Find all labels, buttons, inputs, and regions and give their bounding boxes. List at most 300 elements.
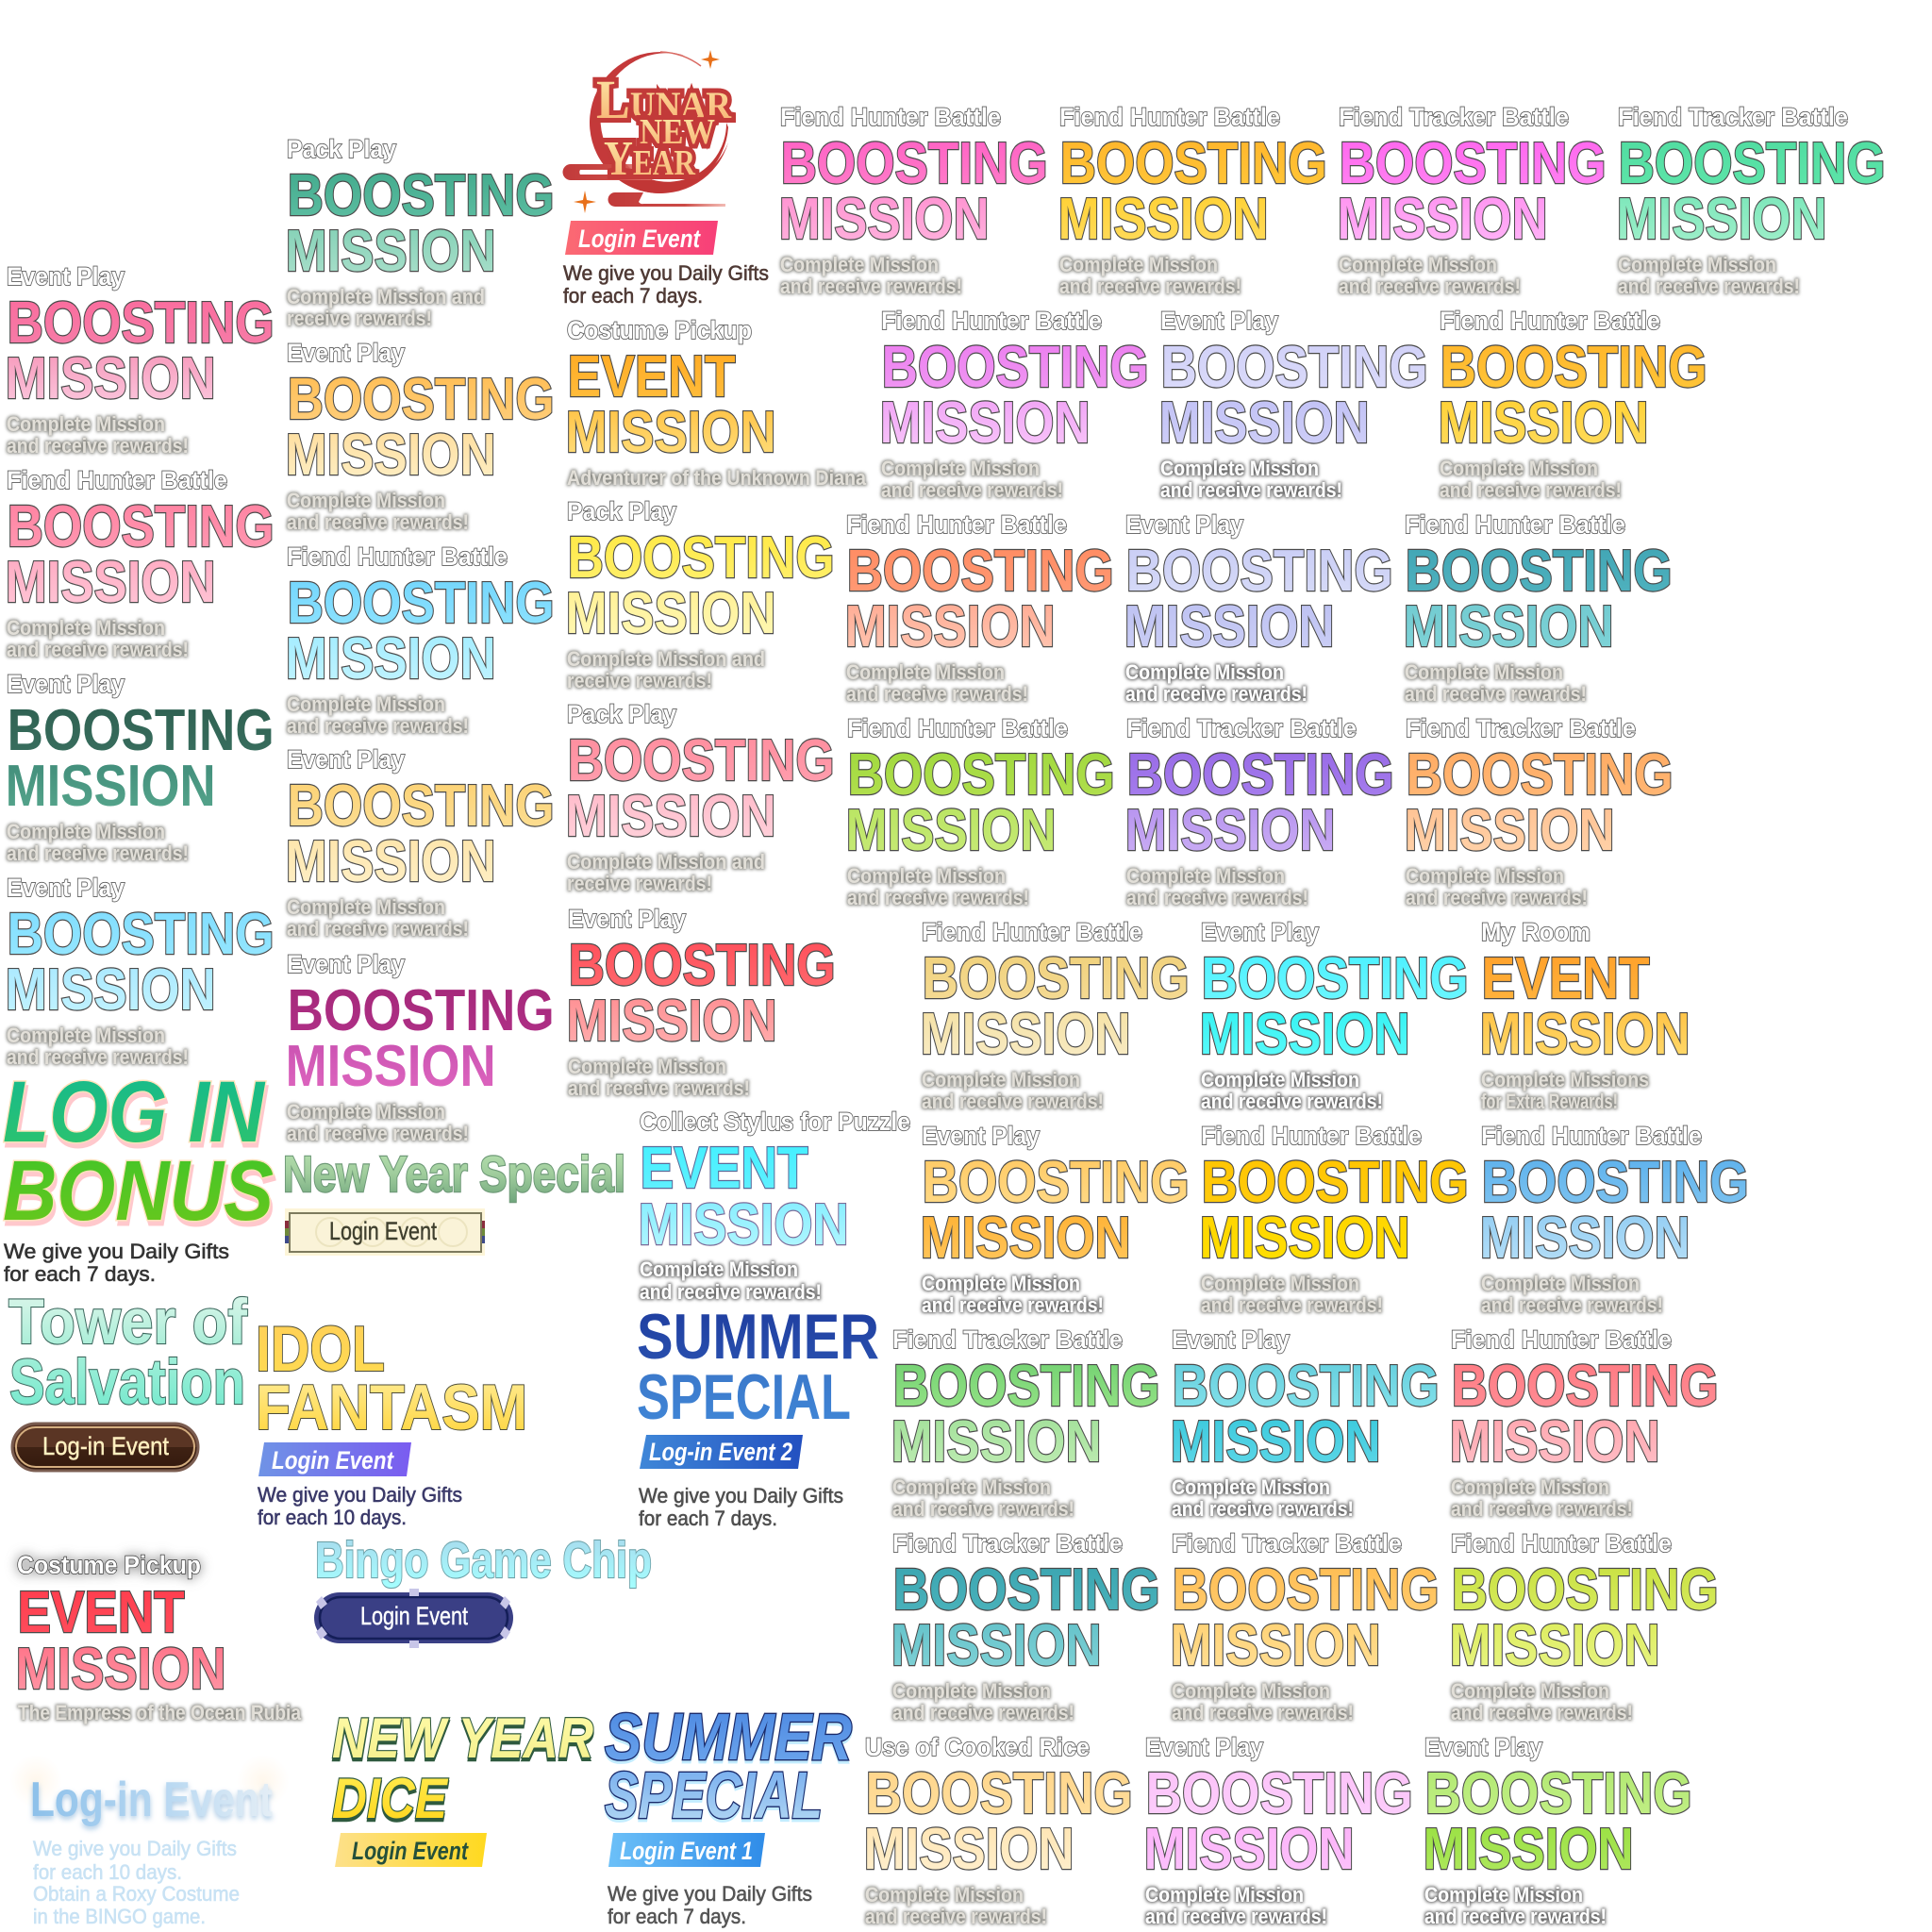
label: Event Play: [7, 874, 125, 902]
panel: row 8 chartreuse Fiend Hunter Battle: [1450, 1529, 1719, 1724]
description: Complete Mission: [287, 895, 445, 919]
heading: MISSION: [567, 989, 777, 1054]
label: Fiend Hunter Battle: [1201, 1122, 1422, 1150]
heading: [16, 1580, 226, 1702]
heading: BOOSTING: [288, 774, 555, 839]
heading: [567, 933, 836, 1054]
label: Fiend Tracker Battle: [892, 1325, 1123, 1354]
label: Fiend Hunter Battle: [922, 918, 1142, 946]
description: and receive rewards!: [1451, 1701, 1633, 1724]
description: Complete Mission: [1440, 457, 1598, 480]
heading: MISSION: [864, 1817, 1074, 1882]
heading: MISSION: [6, 754, 216, 819]
description: [4, 1240, 229, 1286]
description: Complete Mission: [287, 1100, 445, 1124]
panel: Log In Bonus: [3, 1064, 274, 1286]
panel: row 3 teal Fiend Hunter Battle: [1404, 510, 1673, 706]
description: Complete Mission: [568, 1055, 726, 1078]
panel: row 2 violet Fiend Hunter Battle: [880, 307, 1149, 502]
decoration: glow sparkles: [9, 1755, 290, 1807]
label: Event Play: [1145, 1733, 1263, 1761]
description: [1440, 457, 1622, 502]
heading: MISSION: [846, 798, 1057, 863]
description: We give you Daily Gifts: [639, 1484, 843, 1507]
panel: row 3 coral Fiend Hunter Battle: [845, 510, 1114, 706]
heading: [1125, 742, 1394, 863]
panel: row 7 aqua Event Play: [1171, 1325, 1440, 1521]
description: Adventurer of the Unknown Diana: [567, 466, 867, 490]
description: Complete Mission: [846, 660, 1005, 684]
panel: Fiend Hunter Battle rose boosting mission: [6, 466, 275, 661]
label: Event Play: [7, 262, 125, 291]
panel: row 1 hot pink Fiend Hunter Battle: [779, 103, 1048, 298]
heading: [639, 1136, 849, 1257]
description: for each 7 days.: [639, 1507, 777, 1530]
label: Use of Cooked Rice: [865, 1733, 1090, 1761]
label: Fiend Hunter Battle: [1481, 1122, 1702, 1150]
icon: Lunar New Year emblem: [562, 50, 732, 213]
heading: Bingo Game Chip: [315, 1532, 652, 1589]
panel: Pack Play yellow boosting mission: [566, 497, 835, 692]
heading: SUMMER: [605, 1700, 852, 1774]
heading: [891, 1354, 1160, 1474]
description: [1451, 1475, 1633, 1521]
description: and receive rewards!: [7, 841, 189, 865]
panel: row 5 cyan Event Play: [1200, 918, 1469, 1113]
heading: BOOSTING: [893, 1354, 1160, 1419]
description: and receive rewards!: [847, 886, 1029, 909]
description: [1405, 660, 1587, 706]
panel: row 7 salmon Fiend Hunter Battle: [1450, 1325, 1719, 1521]
description: Complete Mission: [1406, 864, 1564, 888]
heading: MISSION: [566, 581, 776, 646]
heading: [1450, 1354, 1719, 1474]
heading: BOOSTING: [923, 946, 1190, 1011]
heading: [8, 1286, 247, 1418]
description: [33, 1837, 240, 1928]
description: [1424, 1883, 1607, 1928]
description: for each 7 days.: [4, 1262, 156, 1286]
badge: Login Event: Login Event: [272, 1446, 394, 1474]
panel: row 3 periwinkle Event Play: [1124, 510, 1393, 706]
heading: BOOSTING: [923, 1150, 1190, 1215]
panel: Event Play sand boosting mission: [286, 745, 555, 941]
badge: Login Event 1: Login Event 1: [620, 1837, 753, 1865]
description: and receive rewards!: [892, 1497, 1074, 1521]
heading: [6, 698, 275, 819]
description: [7, 616, 189, 661]
heading: MISSION: [1480, 1206, 1690, 1271]
panel: row 2 lavender Event Play: [1159, 307, 1428, 502]
description: [1145, 1883, 1327, 1928]
label: Fiend Hunter Battle: [1059, 103, 1280, 131]
badge: Login Event plate: Login Event: [329, 1217, 437, 1245]
description: receive rewards!: [567, 872, 712, 895]
description: and receive rewards!: [1618, 275, 1800, 298]
heading: BONUS: [3, 1144, 274, 1239]
heading: [845, 539, 1114, 659]
label: Fiend Tracker Battle: [1618, 103, 1848, 131]
panel: row 8 apricot Fiend Tracker Battle: [1171, 1529, 1440, 1724]
label: Fiend Hunter Battle: [1440, 307, 1660, 335]
label: Fiend Hunter Battle: [1451, 1325, 1672, 1354]
heading: BOOSTING: [1173, 1557, 1440, 1623]
heading: [1200, 1150, 1469, 1271]
label: Event Play: [568, 905, 686, 933]
description: Complete Mission: [1451, 1475, 1609, 1499]
label: Fiend Hunter Battle: [7, 466, 227, 494]
heading: MISSION: [1171, 1409, 1381, 1474]
heading: [286, 163, 555, 284]
heading: FANTASM: [256, 1372, 527, 1443]
heading: BOOSTING: [1202, 946, 1469, 1011]
description: [287, 895, 469, 941]
heading: BOOSTING: [1127, 742, 1394, 808]
description: for each 10 days.: [33, 1860, 182, 1884]
description: Complete Mission: [7, 1024, 165, 1047]
panel: Pack Play pink boosting mission: [566, 700, 835, 895]
description: and receive rewards!: [1481, 1293, 1663, 1317]
heading: EVENT: [1482, 946, 1650, 1011]
heading: MISSION: [880, 391, 1091, 456]
panel: row 6 blue Fiend Hunter Battle: [1480, 1122, 1749, 1317]
description: [892, 1679, 1074, 1724]
description: Complete Mission: [7, 412, 165, 436]
description: [568, 1055, 750, 1100]
heading: [846, 742, 1115, 863]
heading: New Year Special: [283, 1146, 625, 1203]
heading: BOOSTING: [1340, 131, 1607, 196]
heading: [1404, 539, 1673, 659]
description: Complete Mission and: [567, 647, 765, 671]
description: We give you Daily Gifts: [33, 1837, 237, 1860]
description: and receive rewards!: [1451, 1497, 1633, 1521]
description: [1172, 1679, 1354, 1724]
panel: row 2 orange Fiend Hunter Battle: [1439, 307, 1707, 502]
label: Event Play: [922, 1122, 1040, 1150]
description: [1481, 1068, 1649, 1113]
heading: BOOSTING: [1060, 131, 1327, 196]
heading: [1450, 1557, 1719, 1678]
heading: [1159, 335, 1428, 456]
panel: Event Play dark green boosting mission: [6, 670, 275, 865]
heading: BOOSTING: [8, 291, 275, 356]
heading: MISSION: [1439, 391, 1649, 456]
heading: MISSION: [286, 626, 496, 691]
heading: BOOSTING: [1452, 1557, 1719, 1623]
heading: MISSION: [286, 423, 496, 488]
heading: [1124, 539, 1393, 659]
description: Complete Mission: [287, 489, 445, 512]
description: [639, 1484, 843, 1530]
description: Complete Mission: [922, 1068, 1080, 1091]
heading: MISSION: [1124, 594, 1335, 659]
heading: MISSION: [1125, 798, 1336, 863]
panel: Costume Pickup event mission Diana: [566, 316, 867, 490]
heading: [286, 571, 555, 691]
description: in the BINGO game.: [33, 1905, 206, 1928]
description: [1201, 1272, 1383, 1317]
heading: [286, 367, 555, 488]
description: [1201, 1068, 1383, 1113]
badge: Login Event pill: Login Event: [360, 1602, 468, 1630]
heading: BOOSTING: [1441, 335, 1707, 400]
description: [1125, 660, 1307, 706]
heading: [286, 774, 555, 894]
description: and receive rewards!: [1160, 478, 1342, 502]
label: Costume Pickup: [17, 1551, 201, 1579]
heading: [6, 902, 275, 1023]
heading: DICE: [332, 1767, 449, 1830]
panel: Summer Special log-in event 2: [637, 1301, 879, 1530]
panel: row 5 My Room event mission: [1480, 918, 1690, 1113]
description: and receive rewards!: [892, 1701, 1074, 1724]
badge: Login Event: [335, 1833, 487, 1867]
heading: [566, 728, 835, 849]
description: We give you Daily Gifts: [258, 1483, 462, 1507]
description: receive rewards!: [567, 669, 712, 692]
description: and receive rewards!: [7, 1045, 189, 1069]
description: Complete Mission: [1160, 457, 1319, 480]
description: and receive rewards!: [287, 510, 469, 534]
description: [287, 489, 469, 534]
description: and receive rewards!: [1125, 682, 1307, 706]
heading: [1480, 1150, 1749, 1271]
description: [287, 285, 485, 330]
description: [1160, 457, 1342, 502]
icon: Lunar New Year emblem: LUNAR: [596, 69, 732, 130]
heading: EVENT: [18, 1580, 185, 1645]
label: Event Play: [1160, 307, 1278, 335]
description: [7, 412, 189, 458]
heading: [1480, 946, 1690, 1067]
heading: BOOSTING: [1173, 1354, 1440, 1419]
description: [846, 660, 1028, 706]
description: and receive rewards!: [1405, 682, 1587, 706]
heading: BOOSTING: [1452, 1354, 1719, 1419]
heading: [1439, 335, 1707, 456]
heading: BOOSTING: [893, 1557, 1160, 1623]
heading: SUMMER: [637, 1301, 879, 1373]
heading: [1338, 131, 1607, 252]
heading: BOOSTING: [1406, 539, 1673, 604]
heading: BOOSTING: [288, 571, 555, 636]
description: for each 10 days.: [258, 1506, 407, 1529]
heading: [1405, 742, 1674, 863]
heading: [891, 1557, 1160, 1678]
description: Complete Mission: [892, 1475, 1051, 1499]
heading: MISSION: [1200, 1002, 1410, 1067]
icon: Lunar New Year emblem: NEW: [640, 112, 715, 152]
description: [1172, 1475, 1354, 1521]
description: and receive rewards!: [287, 1122, 469, 1145]
label: Pack Play: [287, 135, 396, 163]
description: Complete Mission: [865, 1883, 1024, 1907]
description: for each 7 days.: [563, 284, 703, 308]
heading: BOOSTING: [288, 978, 555, 1043]
heading: SPECIAL: [637, 1361, 851, 1433]
description: Complete Mission: [287, 692, 445, 716]
badge: Login Event plate: [285, 1208, 485, 1256]
heading: MISSION: [1424, 1817, 1634, 1882]
description: and receive rewards!: [568, 1076, 750, 1100]
heading: BOOSTING: [288, 367, 555, 432]
heading: EVENT: [568, 344, 736, 409]
description: and receive rewards!: [922, 1090, 1104, 1113]
description: Complete Mission: [780, 253, 939, 276]
heading: [332, 1707, 593, 1830]
heading: MISSION: [1480, 1002, 1690, 1067]
panel: Summer Special login event 1: [605, 1700, 852, 1928]
heading: MISSION: [1450, 1613, 1660, 1678]
heading: IDOL: [256, 1313, 385, 1385]
label: Event Play: [1125, 510, 1243, 539]
panel: row 8 teal Fiend Tracker Battle: [891, 1529, 1160, 1724]
panel: Idol Fantasm: [256, 1313, 527, 1529]
heading: [6, 291, 275, 411]
heading: BOOSTING: [1146, 1761, 1413, 1826]
badge: Log-in Event pill: [12, 1424, 198, 1471]
description: [567, 647, 765, 692]
label: Event Play: [1172, 1325, 1290, 1354]
label: Fiend Tracker Battle: [1126, 714, 1357, 742]
description: Complete Mission: [7, 616, 165, 640]
description: [847, 864, 1029, 909]
heading: BOOSTING: [1202, 1150, 1469, 1215]
label: Event Play: [287, 950, 405, 978]
description: Complete Mission: [1126, 864, 1285, 888]
heading: MISSION: [1405, 798, 1615, 863]
label: Pack Play: [567, 497, 676, 525]
badge: Login Event: Login Event: [578, 225, 701, 253]
heading: MISSION: [1159, 391, 1370, 456]
heading: MISSION: [1450, 1409, 1660, 1474]
label: Fiend Tracker Battle: [1172, 1529, 1402, 1557]
description: Complete Mission: [1201, 1068, 1359, 1091]
description: We give you Daily Gifts: [608, 1882, 812, 1906]
panel: Event Play pink boosting mission: [6, 262, 275, 458]
panel: row 6 gold Fiend Hunter Battle: [1200, 1122, 1469, 1317]
panel: row 4 purple Fiend Tracker Battle: [1125, 714, 1394, 909]
description: [7, 1024, 189, 1069]
description: Complete Mission: [1125, 660, 1284, 684]
description: [1126, 864, 1308, 909]
label: My Room: [1481, 918, 1591, 946]
heading: [6, 494, 275, 615]
heading: [921, 1150, 1190, 1271]
panel: Lunar New Year login event: [562, 50, 769, 308]
badge: Log-in Event 2: Log-in Event 2: [649, 1438, 792, 1466]
description: for Extra Rewards!: [1481, 1090, 1618, 1113]
label: Event Play: [1424, 1733, 1542, 1761]
badge: Login Event pill: [314, 1589, 513, 1648]
description: and receive rewards!: [1059, 275, 1241, 298]
heading: BOOSTING: [848, 742, 1115, 808]
description: and receive rewards!: [1126, 886, 1308, 909]
heading: MISSION: [566, 784, 776, 849]
description: [892, 1475, 1074, 1521]
heading: MISSION: [16, 1637, 226, 1702]
panel: New Year Dice: [332, 1707, 593, 1867]
description: and receive rewards!: [287, 714, 469, 738]
panel: row 4 peach Fiend Tracker Battle: [1405, 714, 1674, 909]
heading: BOOSTING: [568, 525, 835, 591]
description: [1406, 864, 1588, 909]
label: Event Play: [1201, 918, 1319, 946]
heading: MISSION: [1338, 187, 1548, 252]
heading: MISSION: [1144, 1817, 1355, 1882]
description: [7, 820, 189, 865]
description: Complete Mission: [1424, 1883, 1583, 1907]
panel: New Year Special: [283, 1146, 625, 1256]
heading: MISSION: [1200, 1206, 1410, 1271]
description: [608, 1882, 812, 1928]
description: receive rewards!: [287, 307, 432, 330]
heading: MISSION: [921, 1206, 1131, 1271]
heading: [566, 344, 776, 465]
heading: MISSION: [639, 1192, 849, 1257]
heading: [605, 1700, 852, 1832]
label: Event Play: [7, 670, 125, 698]
description: [640, 1257, 822, 1304]
description: Complete Mission: [1339, 253, 1497, 276]
heading: Tower of: [8, 1286, 247, 1357]
label: Fiend Hunter Battle: [1451, 1529, 1672, 1557]
heading: BOOSTING: [1425, 1761, 1692, 1826]
heading: BOOSTING: [1126, 539, 1393, 604]
heading: [566, 525, 835, 646]
heading: MISSION: [1171, 1613, 1381, 1678]
panel: Pack Play teal boosting mission: [286, 135, 555, 330]
description: Complete Mission: [892, 1679, 1051, 1703]
panel: Event Play magenta boosting mission: [286, 950, 555, 1145]
heading: BOOSTING: [8, 902, 275, 967]
description: and receive rewards!: [1145, 1905, 1327, 1928]
panel: row 9 cream Use of Cooked Rice: [864, 1733, 1133, 1928]
heading: BOOSTING: [568, 728, 835, 793]
description: and receive rewards!: [1406, 886, 1588, 909]
label: Fiend Hunter Battle: [287, 542, 508, 571]
panel: row 7 green Fiend Tracker Battle: [891, 1325, 1160, 1521]
description: and receive rewards!: [780, 275, 962, 298]
description: Complete Mission: [1451, 1679, 1609, 1703]
badge: Login Event 1: [608, 1833, 765, 1867]
description: Complete Mission: [1172, 1475, 1330, 1499]
heading: MISSION: [286, 219, 496, 284]
heading: BOOSTING: [781, 131, 1048, 196]
panel: Event Play red boosting mission: [567, 905, 836, 1100]
panel: row 1 magenta Fiend Tracker Battle: [1338, 103, 1607, 298]
panel: Event Play sky boosting mission: [6, 874, 275, 1069]
description: Complete Mission and: [567, 850, 765, 874]
label: Costume Pickup: [567, 316, 752, 344]
label: Event Play: [287, 745, 405, 774]
panel: row 9 lime Event Play: [1424, 1733, 1692, 1928]
description: [1481, 1272, 1663, 1317]
description: [1618, 253, 1800, 298]
description: [1451, 1679, 1633, 1724]
description: Complete Mission: [1059, 253, 1218, 276]
label: Event Play: [287, 339, 405, 367]
description: Complete Missions: [1481, 1068, 1649, 1091]
heading: MISSION: [891, 1409, 1102, 1474]
label: Fiend Hunter Battle: [1405, 510, 1625, 539]
description: [922, 1068, 1104, 1113]
description: and receive rewards!: [1424, 1905, 1607, 1928]
heading: [864, 1761, 1133, 1882]
heading: Log-in Event: [30, 1773, 273, 1827]
panel: Log-in Event Roxy Costume: [9, 1755, 290, 1928]
